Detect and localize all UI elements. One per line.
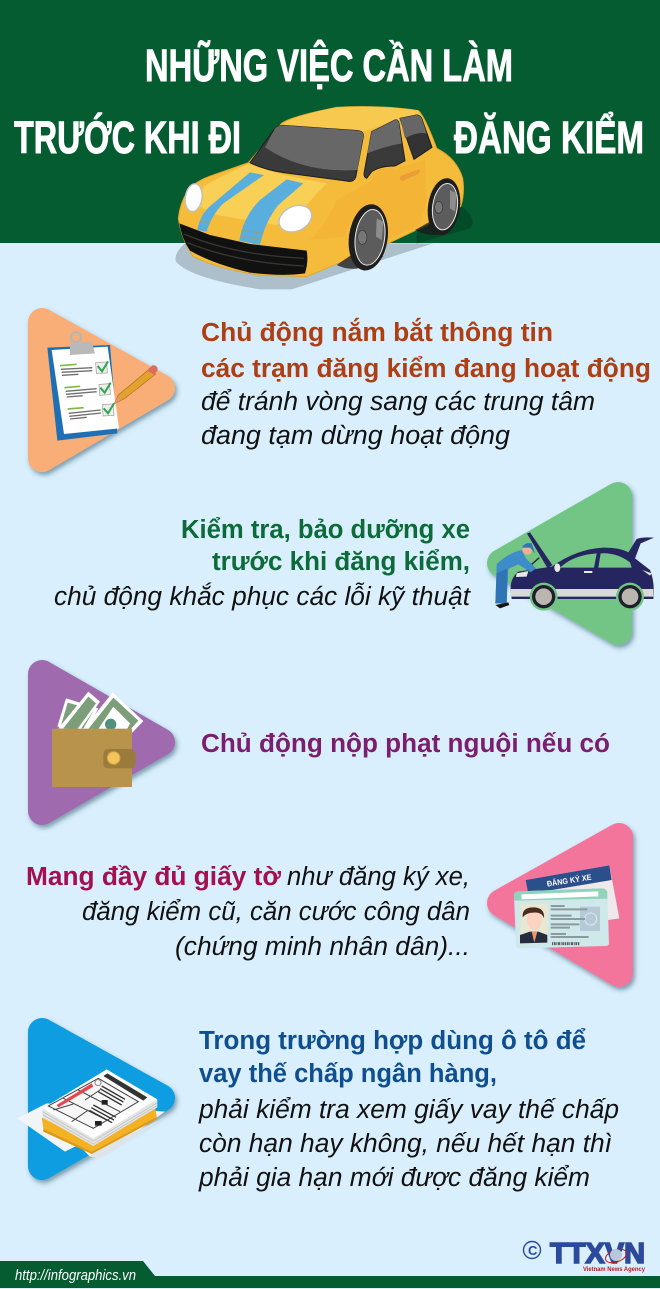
title: NHỮNG VIỆC CẦN LÀM bbox=[145, 40, 513, 91]
racing stripes bbox=[197, 172, 264, 232]
purple triangle bbox=[42, 674, 161, 811]
windshield bbox=[250, 126, 363, 181]
text block: còn hạn hay không, nếu hết hạn thì bbox=[199, 1130, 612, 1158]
text block: Kiểm tra, bảo dưỡng xe bbox=[181, 516, 470, 544]
text block: đăng kiểm cũ, căn cước công dân bbox=[82, 898, 470, 926]
text block: phải kiểm tra xem giấy vay thế chấp bbox=[198, 1096, 619, 1124]
text block: Trong trường hợp dùng ô tô để bbox=[199, 1027, 586, 1055]
text block bbox=[201, 317, 651, 450]
panel: item 4 bbox=[26, 837, 619, 973]
green triangle bbox=[501, 496, 618, 631]
text block: để tránh vòng sang các trung tâm bbox=[201, 388, 595, 416]
panel: item 5 bbox=[17, 1027, 619, 1192]
text block: như đăng ký xe, bbox=[287, 863, 470, 891]
text block: đang tạm dừng hoạt động bbox=[201, 422, 510, 450]
icon: mechanic and car bbox=[495, 532, 654, 611]
blue triangle bbox=[42, 1032, 161, 1166]
text block bbox=[26, 863, 470, 961]
orange triangle bbox=[42, 322, 161, 458]
pink triangle bbox=[501, 837, 619, 973]
icon: stack of documents bbox=[17, 1069, 165, 1158]
wheels bbox=[337, 202, 392, 273]
title: TRƯỚC KHI ĐI bbox=[14, 112, 241, 163]
text block: trước khi đăng kiểm, bbox=[212, 548, 470, 576]
panel: item 1 bbox=[42, 317, 651, 458]
text block: Mang đầy đủ giấy tờ bbox=[26, 863, 282, 891]
text block: các trạm đăng kiểm đang hoạt động bbox=[201, 355, 651, 383]
text block bbox=[198, 1027, 619, 1192]
icon: ID cards bbox=[514, 865, 619, 948]
icon: wallet bbox=[52, 692, 143, 787]
icon: ID cards: ĐĂNG KÝ XE bbox=[546, 873, 593, 889]
logo: TTXVN: C bbox=[528, 1243, 538, 1258]
headlights bbox=[183, 183, 204, 213]
footer band bbox=[0, 1261, 660, 1288]
title bbox=[14, 40, 644, 163]
icon: clipboard bbox=[47, 332, 158, 441]
text block: vay thế chấp ngân hàng, bbox=[199, 1060, 497, 1088]
text block bbox=[54, 516, 471, 611]
text block: chủ động khắc phục các lỗi kỹ thuật bbox=[54, 582, 471, 611]
mirror and handle bbox=[372, 167, 395, 182]
text block: phải gia hạn mới được đăng kiểm bbox=[198, 1164, 590, 1192]
text block: (chứng minh nhân dân)... bbox=[175, 933, 470, 961]
logo: TTXVN: Vietnam News Agency bbox=[583, 1266, 645, 1273]
text block: Chủ động nắm bắt thông tin bbox=[201, 317, 553, 347]
header band bbox=[0, 0, 660, 243]
icon: yellow car bbox=[176, 107, 473, 289]
panel: item 3 bbox=[42, 674, 610, 811]
text: Chủ động nộp phạt nguội nếu có bbox=[201, 730, 610, 758]
footer band: http://infographics.vn bbox=[15, 1267, 136, 1284]
side windows bbox=[364, 120, 405, 178]
grille bbox=[179, 223, 307, 275]
logo: TTXVN: TTXVN bbox=[550, 1238, 645, 1270]
panel: item 2 bbox=[54, 496, 654, 631]
